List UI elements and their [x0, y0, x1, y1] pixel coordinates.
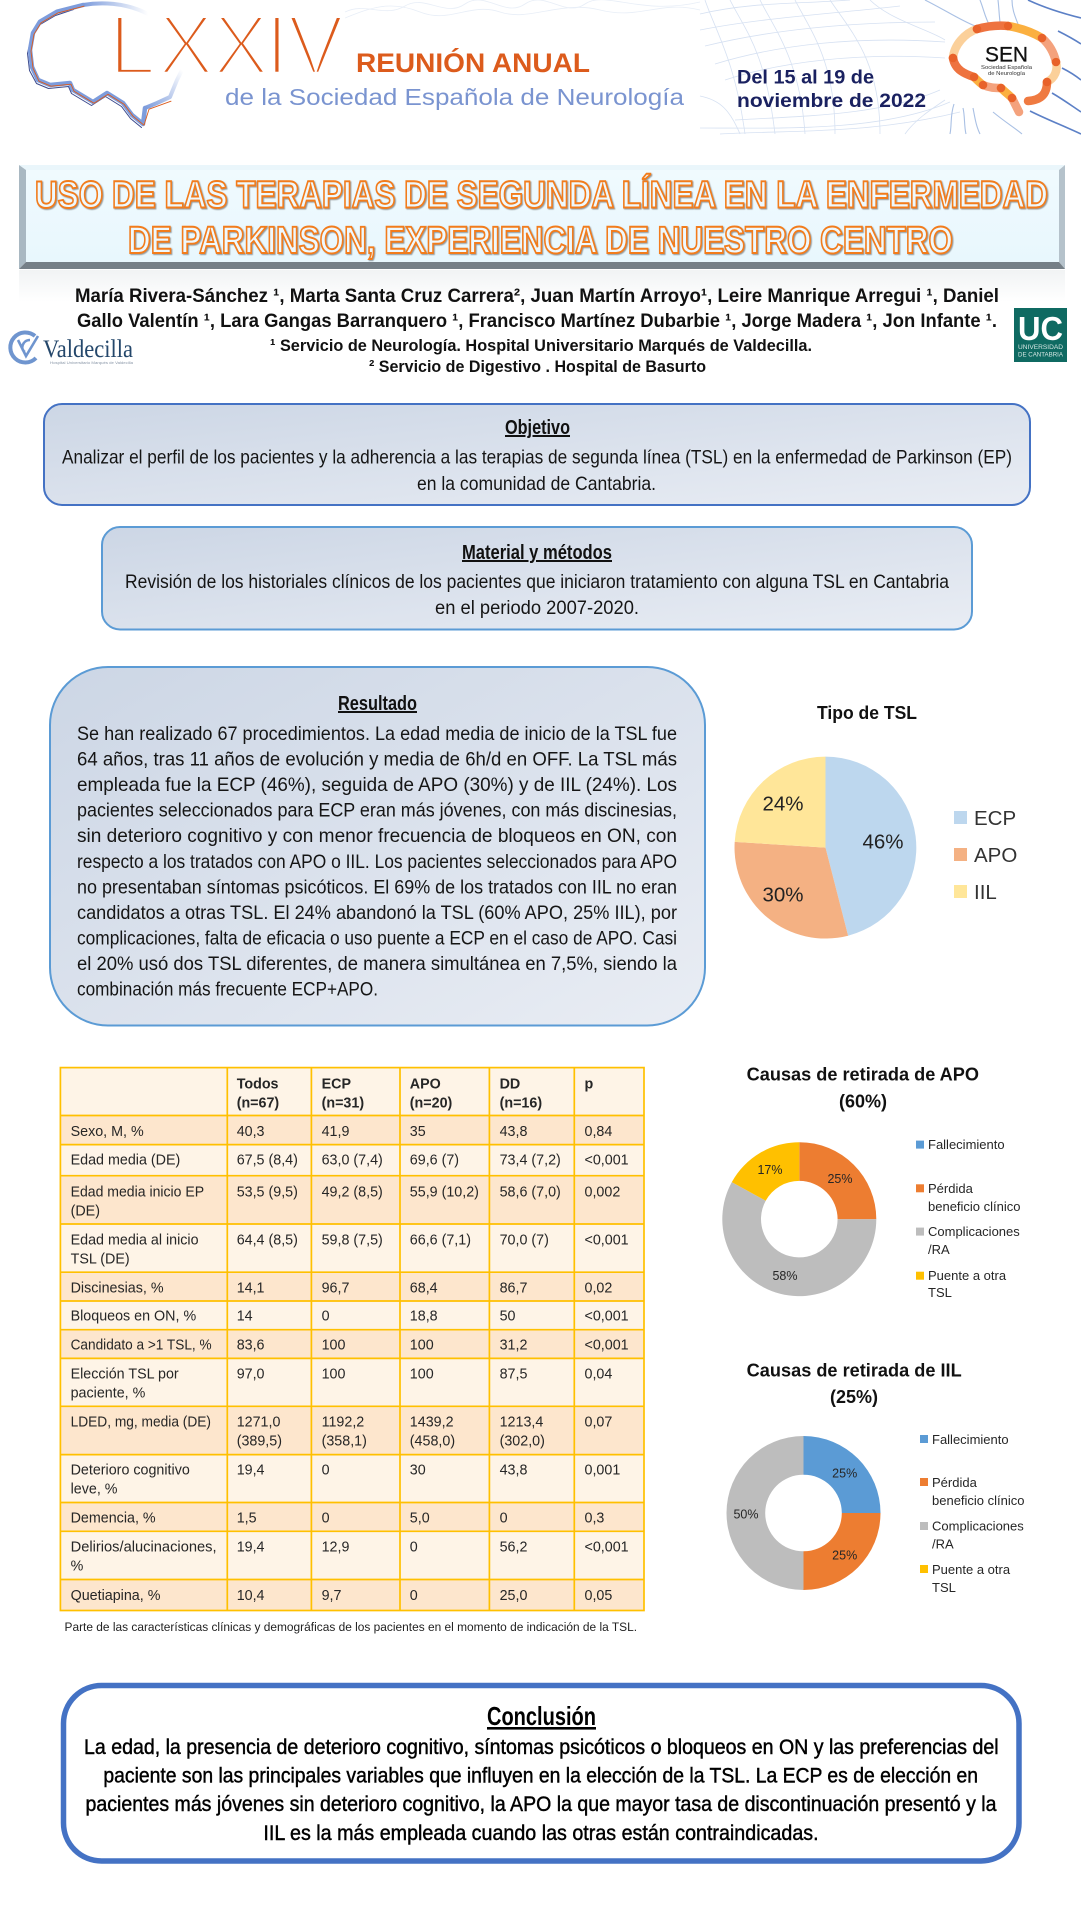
- row: sexo: 35: [410, 1124, 426, 1140]
- row: LDED: (358,1): [322, 1434, 367, 1450]
- donut legend: TSL: [928, 1285, 952, 1300]
- icon: SEN logo: Sociedad Española: [981, 65, 1032, 71]
- donut legend: beneficio clínico: [928, 1199, 1020, 1214]
- row: deterioro cognitivo: Deterioro cognitivo: [71, 1462, 190, 1478]
- icon: Valdecilla logo: Valdecilla: [43, 336, 133, 363]
- row: edad inicio TSL: Edad media al inicio: [71, 1232, 199, 1248]
- donut legend: Pérdida: [928, 1181, 974, 1196]
- conclusion text: IIL es la más empleada cuando las otras están contraindicadas.: [263, 1821, 819, 1845]
- row: deterioro cognitivo: 30: [410, 1462, 426, 1478]
- icon: SEN logo: [949, 22, 1060, 112]
- donut legend: Pérdida: [932, 1475, 978, 1490]
- donut legend: /RA: [932, 1536, 954, 1552]
- row: demencia: 0: [500, 1510, 508, 1526]
- donut labels: 25%: [832, 1548, 857, 1562]
- row: eleccion: 97,0: [237, 1366, 265, 1382]
- row: quetiapina: 9,7: [322, 1588, 342, 1604]
- row: discinesias: 68,4: [410, 1280, 438, 1296]
- resultado text: candidatos a otras TSL. El 24% abandonó la TSL (60% APO, 25% IIL), por: [77, 902, 677, 924]
- table header row: APO: [410, 1076, 441, 1092]
- resultado text: respecto a los tratados con APO o IIL. Los pacientes seleccionados para APO: [77, 851, 677, 873]
- row: edad inicio TSL: <0,001: [584, 1232, 629, 1248]
- edition numeral: LXXIV: [109, 0, 344, 92]
- icon: Valdecilla logo: Hospital Universitario Marqués de Valdecilla: [50, 360, 134, 365]
- chart title: Causas de retirada de APO: [747, 1065, 979, 1085]
- row: eleccion: Elección TSL por: [71, 1366, 179, 1382]
- resultado text: empleada fue la ECP (46%), seguida de APO (30%) y de IIL (24%). Los: [77, 774, 677, 796]
- resultado text: no presentaban síntomas psicóticos. El 69% de los tratados con IIL no eran: [77, 876, 677, 898]
- table header row: ECP: [322, 1076, 351, 1092]
- meeting dates: [737, 68, 926, 112]
- donut labels: [733, 1466, 857, 1562]
- row: eleccion: 0,04: [584, 1366, 612, 1382]
- resultado text: el 20% usó dos TSL diferentes, de manera simultánea en 7,5%, siendo la: [77, 953, 677, 975]
- row: quetiapina: 0,05: [584, 1588, 612, 1604]
- authors and affiliations: [75, 286, 999, 376]
- donut legend: Puente a otra: [932, 1562, 1011, 1577]
- resultado text: Se han realizado 67 procedimientos. La edad media de inicio de la TSL fue: [77, 723, 677, 745]
- row: bloqueos: <0,001: [584, 1309, 629, 1325]
- donut legend: Fallecimiento: [932, 1432, 1009, 1447]
- row: eleccion: 87,5: [500, 1366, 527, 1382]
- row: delirios: 0: [410, 1540, 418, 1556]
- row: sexo: 43,8: [500, 1124, 527, 1140]
- row: LDED: (458,0): [410, 1434, 455, 1450]
- donut legend: /RA: [928, 1242, 950, 1257]
- row: deterioro cognitivo: 43,8: [500, 1462, 527, 1478]
- row: discinesias: 14,1: [237, 1280, 265, 1296]
- row: LDED: 0,07: [584, 1414, 612, 1430]
- objetivo text: [62, 447, 1012, 495]
- panel: material y metodos: [102, 527, 972, 630]
- row: edad media: [60, 1145, 644, 1176]
- row: deterioro cognitivo: [60, 1455, 644, 1502]
- row: sexo: [60, 1116, 644, 1145]
- row: delirios: [60, 1531, 644, 1580]
- chart title: (25%): [830, 1387, 878, 1407]
- row: LDED: (389,5): [237, 1434, 282, 1450]
- row: edad inicio EP: (DE): [71, 1204, 100, 1220]
- society name: de la Sociedad Española de Neurología: [225, 84, 684, 110]
- material y metodos text: [125, 571, 949, 619]
- donut labels: 25%: [827, 1172, 853, 1186]
- row: demencia: 1,5: [237, 1510, 257, 1526]
- panel: objetivo: [44, 404, 1030, 505]
- row: quetiapina: Quetiapina, %: [71, 1588, 161, 1604]
- chart title: [747, 1360, 962, 1407]
- row: bloqueos: 50: [500, 1309, 516, 1325]
- row: candidato: 100: [322, 1338, 346, 1354]
- row: edad media: 69,6 (7): [410, 1152, 459, 1168]
- row: sexo: 41,9: [322, 1124, 349, 1140]
- donut legend: [916, 1137, 1020, 1300]
- donut legend: beneficio clínico: [932, 1493, 1024, 1508]
- row: delirios: %: [71, 1559, 84, 1575]
- table header row: (n=67): [237, 1096, 279, 1112]
- donut chart: causas de retirada de IIL: [726, 1360, 1024, 1595]
- background wave pattern: [345, 0, 960, 134]
- row: quetiapina: 0: [410, 1588, 418, 1604]
- row: candidato: 83,6: [237, 1338, 265, 1354]
- authors and affiliations: Gallo Valentín ¹, Lara Gangas Barranquero ¹, Francisco Martínez Dubarbie ¹, Jorge Madera ¹, Jon Infante ¹.: [77, 311, 997, 332]
- title text: [35, 173, 1048, 262]
- resultado text: sin deterioro cognitivo y con menor frecuencia de bloqueos en ON, con: [77, 825, 677, 847]
- conclusion text: La edad, la presencia de deterioro cognitivo, síntomas psicóticos o bloqueos en ON y las preferencias del: [84, 1735, 999, 1759]
- pie legend: [954, 807, 1017, 904]
- row: bloqueos: 14: [237, 1309, 253, 1325]
- meeting title: REUNIÓN ANUAL: [356, 47, 590, 78]
- row: bloqueos: 18,8: [410, 1309, 438, 1325]
- conclusion text: paciente son las principales variables que influyen en la elección de la TSL. La ECP es de elección en: [103, 1764, 978, 1788]
- resultado text: complicaciones, falta de eficacia o uso puente a ECP en el caso de APO. Casi: [77, 927, 677, 949]
- conclusion text: pacientes más jóvenes sin deterioro cognitivo, la APO la que mayor tasa de discontinuación presentó y la: [86, 1792, 997, 1816]
- row: demencia: 5,0: [410, 1510, 430, 1526]
- row: candidato: <0,001: [584, 1338, 629, 1354]
- row: delirios: 12,9: [322, 1540, 349, 1556]
- row: LDED: LDED, mg, media (DE): [71, 1414, 211, 1430]
- row: candidato: 100: [410, 1338, 434, 1354]
- row: edad inicio TSL: 59,8 (7,5): [322, 1232, 383, 1248]
- row: LDED: 1271,0: [237, 1414, 280, 1430]
- row: delirios: <0,001: [584, 1540, 629, 1556]
- donut labels: 25%: [832, 1466, 857, 1480]
- pie chart: tipo de TSL: [735, 703, 1017, 939]
- table header row: [60, 1068, 644, 1116]
- row: LDED: 1192,2: [322, 1414, 364, 1430]
- row: quetiapina: [60, 1580, 644, 1610]
- row: LDED: 1439,2: [410, 1414, 454, 1430]
- table header row: p: [584, 1076, 594, 1092]
- row: edad inicio TSL: 70,0 (7): [500, 1232, 549, 1248]
- row: deterioro cognitivo: 0: [322, 1462, 330, 1478]
- donut legend: TSL: [932, 1580, 956, 1595]
- donut legend: Complicaciones: [932, 1518, 1024, 1534]
- header banner: [28, 0, 1081, 134]
- chart title: [747, 1065, 979, 1112]
- heading: material y metodos: Material y métodos: [462, 542, 612, 564]
- brain outline icon: [28, 3, 182, 127]
- row: discinesias: [60, 1272, 644, 1301]
- row: edad inicio EP: 55,9 (10,2): [410, 1184, 479, 1200]
- row: edad media: 67,5 (8,4): [237, 1152, 298, 1168]
- row: deterioro cognitivo: 19,4: [237, 1462, 265, 1478]
- heading: objetivo: Objetivo: [505, 417, 570, 439]
- resultado text: pacientes seleccionados para ECP eran más jóvenes, con más discinesias,: [77, 800, 677, 822]
- material y metodos text: en el periodo 2007-2020.: [435, 597, 639, 619]
- row: LDED: 1213,4: [500, 1414, 543, 1430]
- table header row: Todos: [237, 1076, 279, 1092]
- row: edad inicio EP: Edad media inicio EP: [71, 1184, 204, 1200]
- row: bloqueos: [60, 1301, 644, 1330]
- icon: Universidad de Cantabria logo: DE CANTABRIA: [1018, 352, 1064, 358]
- pie legend: APO: [974, 844, 1017, 867]
- donut slices: [722, 1142, 876, 1296]
- icon: Valdecilla logo: [10, 332, 134, 365]
- panel: resultado: [50, 667, 705, 1026]
- pie legend: IIL: [974, 881, 997, 904]
- donut legend: Fallecimiento: [928, 1137, 1005, 1152]
- row: candidato: 31,2: [500, 1338, 527, 1354]
- table header row: (n=20): [410, 1096, 453, 1112]
- donut labels: [757, 1163, 853, 1283]
- row: edad media: 63,0 (7,4): [322, 1152, 383, 1168]
- row: eleccion: 100: [410, 1366, 434, 1382]
- pie labels: [762, 792, 904, 906]
- donut chart: causas de retirada de APO: [722, 1065, 1020, 1300]
- resultado text: 64 años, tras 11 años de evolución y media de 6h/d en OFF. La TSL más: [77, 748, 677, 770]
- row: sexo: Sexo, M, %: [71, 1124, 144, 1140]
- authors and affiliations: ² Servicio de Digestivo . Hospital de Basurto: [369, 357, 706, 376]
- row: edad inicio EP: 0,002: [584, 1184, 620, 1200]
- conclusion text: [84, 1735, 999, 1845]
- row: LDED: [60, 1406, 644, 1455]
- row: quetiapina: 25,0: [500, 1588, 527, 1604]
- pie legend: ECP: [974, 807, 1016, 830]
- row: eleccion: [60, 1358, 644, 1406]
- material y metodos text: Revisión de los historiales clínicos de los pacientes que iniciaron tratamiento con alguna TSL en Cantabria: [125, 571, 949, 593]
- pie labels: 46%: [862, 830, 904, 854]
- pie labels: 24%: [762, 792, 804, 816]
- heading: conclusion: Conclusión: [487, 1701, 596, 1731]
- meeting dates: noviembre de 2022: [737, 91, 926, 112]
- row: candidato: [60, 1330, 644, 1358]
- row: deterioro cognitivo: leve, %: [71, 1482, 118, 1498]
- donut legend: Puente a otra: [928, 1268, 1007, 1283]
- row: edad inicio EP: [60, 1176, 644, 1224]
- row: edad media: <0,001: [584, 1152, 629, 1168]
- row: discinesias: 86,7: [500, 1280, 527, 1296]
- table: patient characteristics: [60, 1068, 644, 1610]
- row: discinesias: 0,02: [584, 1280, 612, 1296]
- row: LDED: (302,0): [500, 1434, 545, 1450]
- row: demencia: [60, 1502, 644, 1531]
- row: eleccion: paciente, %: [71, 1386, 146, 1402]
- row: sexo: 40,3: [237, 1124, 265, 1140]
- title banner: [19, 165, 1065, 302]
- row: bloqueos: Bloqueos en ON, %: [71, 1309, 196, 1325]
- icon: SEN logo: de Neurología: [988, 71, 1025, 77]
- row: discinesias: 96,7: [322, 1280, 349, 1296]
- row: edad inicio TSL: 64,4 (8,5): [237, 1232, 298, 1248]
- table header row: (n=16): [500, 1096, 542, 1112]
- row: edad inicio EP: 53,5 (9,5): [237, 1184, 298, 1200]
- donut labels: 17%: [757, 1163, 783, 1177]
- row: demencia: 0,3: [584, 1510, 604, 1526]
- row: demencia: Demencia, %: [71, 1510, 156, 1526]
- panel: conclusion: [64, 1686, 1019, 1861]
- row: edad media: 73,4 (7,2): [500, 1152, 561, 1168]
- row: sexo: 0,84: [584, 1124, 612, 1140]
- row: deterioro cognitivo: 0,001: [584, 1462, 620, 1478]
- row: edad media: Edad media (DE): [71, 1152, 180, 1168]
- row: candidato: Candidato a >1 TSL, %: [71, 1338, 212, 1354]
- donut labels: 58%: [772, 1269, 798, 1283]
- authors and affiliations: María Rivera-Sánchez ¹, Marta Santa Cruz Carrera², Juan Martín Arroyo¹, Leire Manrique Arregui ¹, Daniel: [75, 286, 999, 307]
- row: quetiapina: 10,4: [237, 1588, 265, 1604]
- row: delirios: 19,4: [237, 1540, 265, 1556]
- donut slices: [726, 1436, 880, 1590]
- chart title: Causas de retirada de IIL: [747, 1360, 962, 1380]
- row: edad inicio EP: 49,2 (8,5): [322, 1184, 383, 1200]
- heading: resultado: Resultado: [338, 693, 417, 715]
- row: eleccion: 100: [322, 1366, 346, 1382]
- meeting dates: Del 15 al 19 de: [737, 68, 874, 89]
- donut labels: 50%: [733, 1508, 759, 1522]
- table header row: (n=31): [322, 1096, 364, 1112]
- icon: Universidad de Cantabria logo: UNIVERSIDAD: [1018, 344, 1063, 351]
- resultado text: [77, 723, 677, 1001]
- row: edad inicio TSL: TSL (DE): [71, 1252, 130, 1268]
- chart title: (60%): [839, 1092, 887, 1112]
- resultado text: combinación más frecuente ECP+APO.: [77, 979, 378, 1001]
- row: edad inicio TSL: [60, 1224, 644, 1272]
- icon: Universidad de Cantabria logo: [1014, 308, 1067, 362]
- table caption: Parte de las características clínicas y demográficas de los pacientes en el momento de indicación de la TSL.: [64, 1620, 637, 1634]
- donut legend: Complicaciones: [928, 1224, 1020, 1239]
- row: delirios: Delirios/alucinaciones,: [71, 1540, 217, 1556]
- row: demencia: 0: [322, 1510, 330, 1526]
- pie slices: [735, 757, 916, 939]
- table header row: DD: [500, 1076, 520, 1092]
- row: delirios: 56,2: [500, 1540, 527, 1556]
- authors and affiliations: ¹ Servicio de Neurología. Hospital Universitario Marqués de Valdecilla.: [270, 336, 812, 355]
- pie labels: 30%: [762, 884, 804, 906]
- row: discinesias: Discinesias, %: [71, 1280, 164, 1296]
- chart title: Tipo de TSL: [817, 703, 917, 723]
- row: edad inicio EP: 58,6 (7,0): [500, 1184, 561, 1200]
- donut legend: [920, 1432, 1024, 1595]
- icon: Universidad de Cantabria logo: UC: [1018, 310, 1063, 347]
- row: bloqueos: 0: [322, 1309, 330, 1325]
- objetivo text: en la comunidad de Cantabria.: [417, 473, 656, 495]
- icon: SEN logo: SEN: [985, 43, 1028, 67]
- accent blue lines: [925, 0, 1022, 134]
- row: edad inicio TSL: 66,6 (7,1): [410, 1232, 471, 1248]
